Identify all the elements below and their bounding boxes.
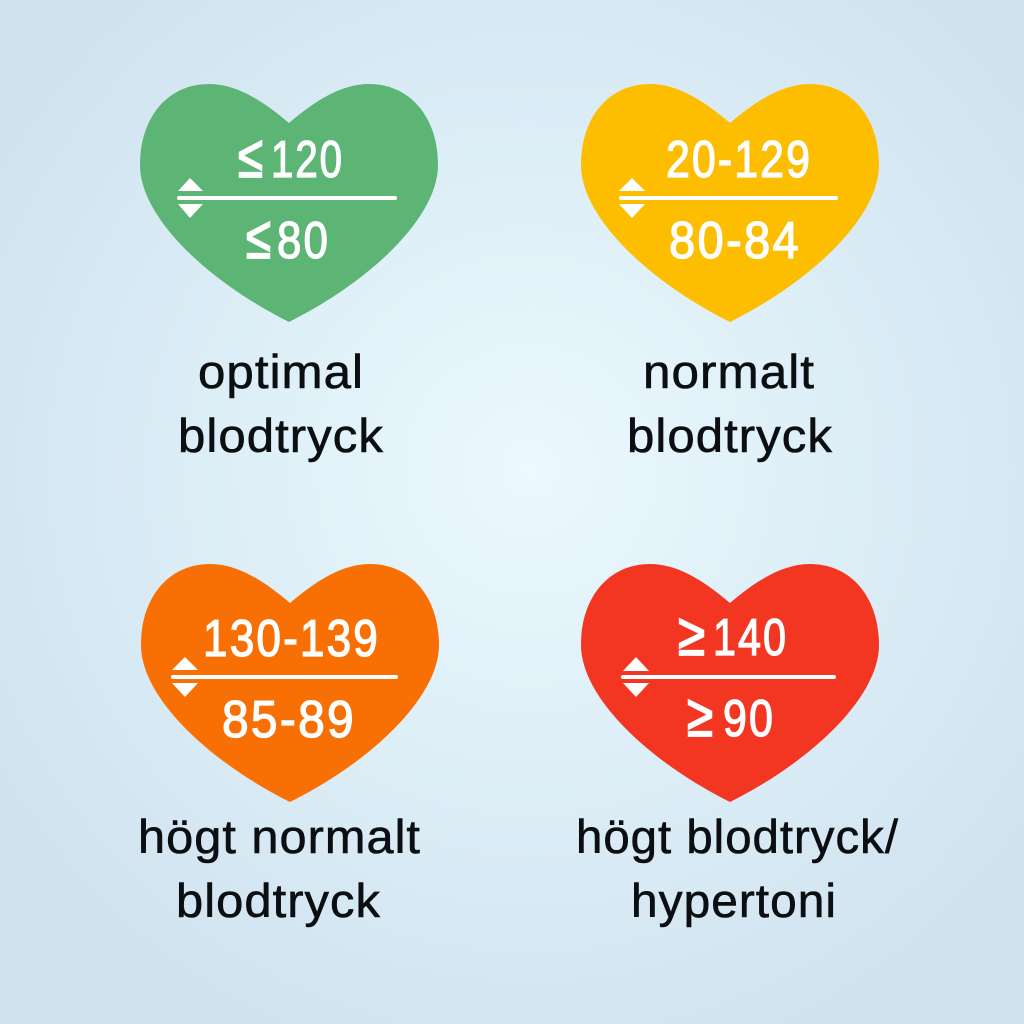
label: optimal blodtryck: optimal bbox=[198, 345, 364, 398]
systolic value: 130-139 bbox=[203, 610, 380, 668]
diastolic value: 85-89 bbox=[222, 691, 356, 749]
panel: high blood pressure / hypertension bbox=[576, 564, 899, 927]
label: normalt blodtryck: blodtryck bbox=[627, 409, 833, 462]
icon: divider with arrows bbox=[177, 178, 397, 218]
icon: divider with arrows bbox=[619, 178, 838, 218]
label: högt normalt blodtryck: blodtryck bbox=[176, 874, 381, 927]
systolic value: ≤ bbox=[238, 123, 263, 190]
icon: divider with arrows bbox=[621, 657, 836, 697]
label: högt blodtryck / hypertoni bbox=[576, 810, 899, 927]
diastolic value: 90 bbox=[723, 690, 775, 748]
label: högt blodtryck / hypertoni: hypertoni bbox=[631, 874, 837, 927]
systolic value: 140 bbox=[713, 609, 788, 667]
icon: orange heart bbox=[141, 564, 439, 802]
diastolic value: ≤ bbox=[246, 204, 271, 271]
diastolic value bbox=[687, 682, 775, 749]
panel: normal blood pressure bbox=[581, 84, 879, 462]
label: normalt blodtryck bbox=[627, 345, 833, 462]
icon: red heart bbox=[581, 564, 879, 802]
panel: optimal blood pressure bbox=[140, 84, 438, 462]
label: högt normalt blodtryck bbox=[138, 810, 421, 927]
systolic value: 120 bbox=[271, 131, 344, 189]
label: normalt blodtryck: normalt bbox=[643, 345, 815, 398]
diastolic value: 80 bbox=[277, 212, 330, 270]
label: optimal blodtryck bbox=[178, 345, 384, 462]
systolic value: ≥ bbox=[678, 601, 705, 668]
systolic value: 20-129 bbox=[666, 131, 812, 189]
diastolic value: ≥ bbox=[687, 682, 713, 749]
label: högt normalt blodtryck: högt normalt bbox=[138, 810, 421, 863]
systolic value bbox=[238, 123, 344, 190]
diastolic value: 80-84 bbox=[669, 212, 801, 270]
icon: green heart bbox=[140, 84, 438, 322]
diastolic value bbox=[246, 204, 330, 271]
systolic value bbox=[678, 601, 788, 668]
label: optimal blodtryck: blodtryck bbox=[178, 409, 384, 462]
icon: divider with arrows bbox=[171, 657, 398, 697]
icon: yellow heart bbox=[581, 84, 879, 322]
label: högt blodtryck / hypertoni: högt blodtryck/ bbox=[576, 810, 899, 863]
panel: high normal blood pressure bbox=[138, 564, 439, 927]
